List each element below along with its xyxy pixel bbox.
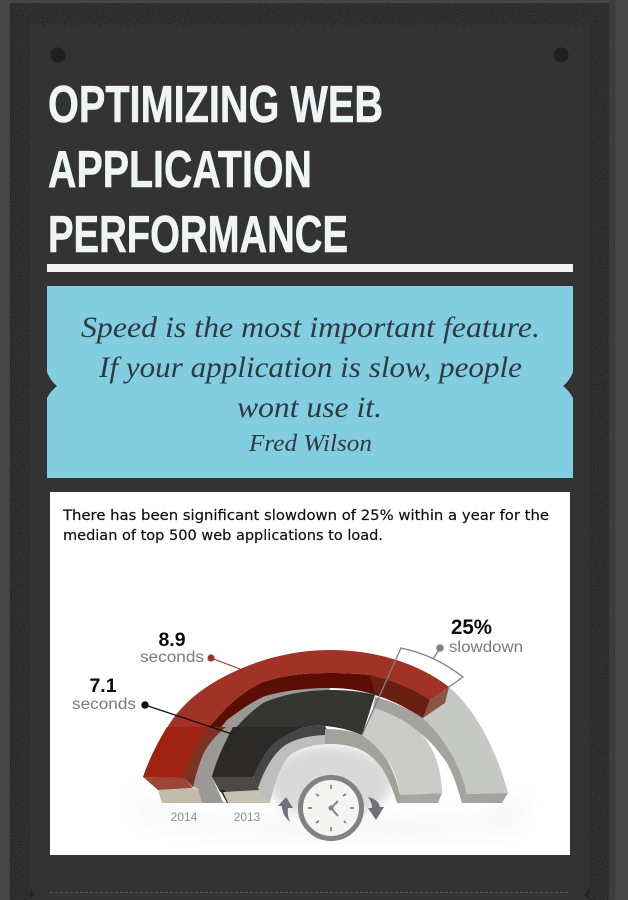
left rotation arrow — [278, 797, 293, 822]
grey band left — [193, 688, 330, 803]
inner bevel — [258, 735, 330, 803]
quote panel — [47, 286, 573, 478]
clock icon — [300, 778, 362, 838]
intro text: median of top 500 web applications to load. — [63, 528, 383, 544]
white chart panel — [50, 492, 570, 855]
label 25% slowdown: 25% — [451, 616, 492, 639]
label 8.9 seconds: seconds — [140, 649, 204, 666]
quote text: Speed is the most important feature. — [81, 311, 540, 344]
7.1 leader — [141, 701, 232, 734]
year label 2014: 2014 — [171, 810, 198, 824]
quote text: If your application is slow, people — [98, 351, 522, 384]
quote text — [81, 311, 540, 457]
label 7.1 seconds — [72, 675, 136, 713]
title underline — [47, 264, 573, 272]
quote text: wont use it. — [237, 391, 382, 424]
grey outer ring — [373, 687, 508, 803]
label 8.9 seconds — [140, 629, 204, 666]
grey inner ring — [253, 708, 442, 803]
quote text: Fred Wilson — [248, 431, 372, 457]
intro text — [62, 508, 549, 544]
label 7.1 seconds: seconds — [72, 696, 136, 713]
dark inner wall — [253, 726, 330, 788]
grey inner wall — [325, 729, 400, 803]
rivet right — [554, 48, 568, 62]
year label 2013: 2013 — [234, 810, 261, 824]
right rotation arrow — [368, 797, 384, 820]
label 25% slowdown: slowdown — [449, 639, 523, 656]
intro text: There has been significant slowdown of 25% within a year for the — [62, 508, 549, 524]
chart shadow — [125, 790, 530, 839]
rivet left — [50, 48, 66, 62]
title — [48, 76, 383, 264]
label 8.9 seconds: 8.9 — [158, 629, 186, 651]
title: PERFORMANCE — [48, 206, 348, 264]
arc chart — [141, 644, 508, 838]
label 7.1 seconds: 7.1 — [89, 675, 117, 697]
slowdown leader — [433, 644, 444, 659]
slowdown bracket — [362, 648, 463, 735]
8.9 leader — [207, 654, 240, 669]
title: OPTIMIZING WEB — [48, 76, 383, 134]
inner glow behind clock — [268, 746, 392, 818]
title: APPLICATION — [48, 141, 312, 199]
label 25% slowdown — [449, 616, 523, 656]
red arc 2014 — [143, 650, 449, 803]
dark arc 2013 — [212, 690, 375, 803]
